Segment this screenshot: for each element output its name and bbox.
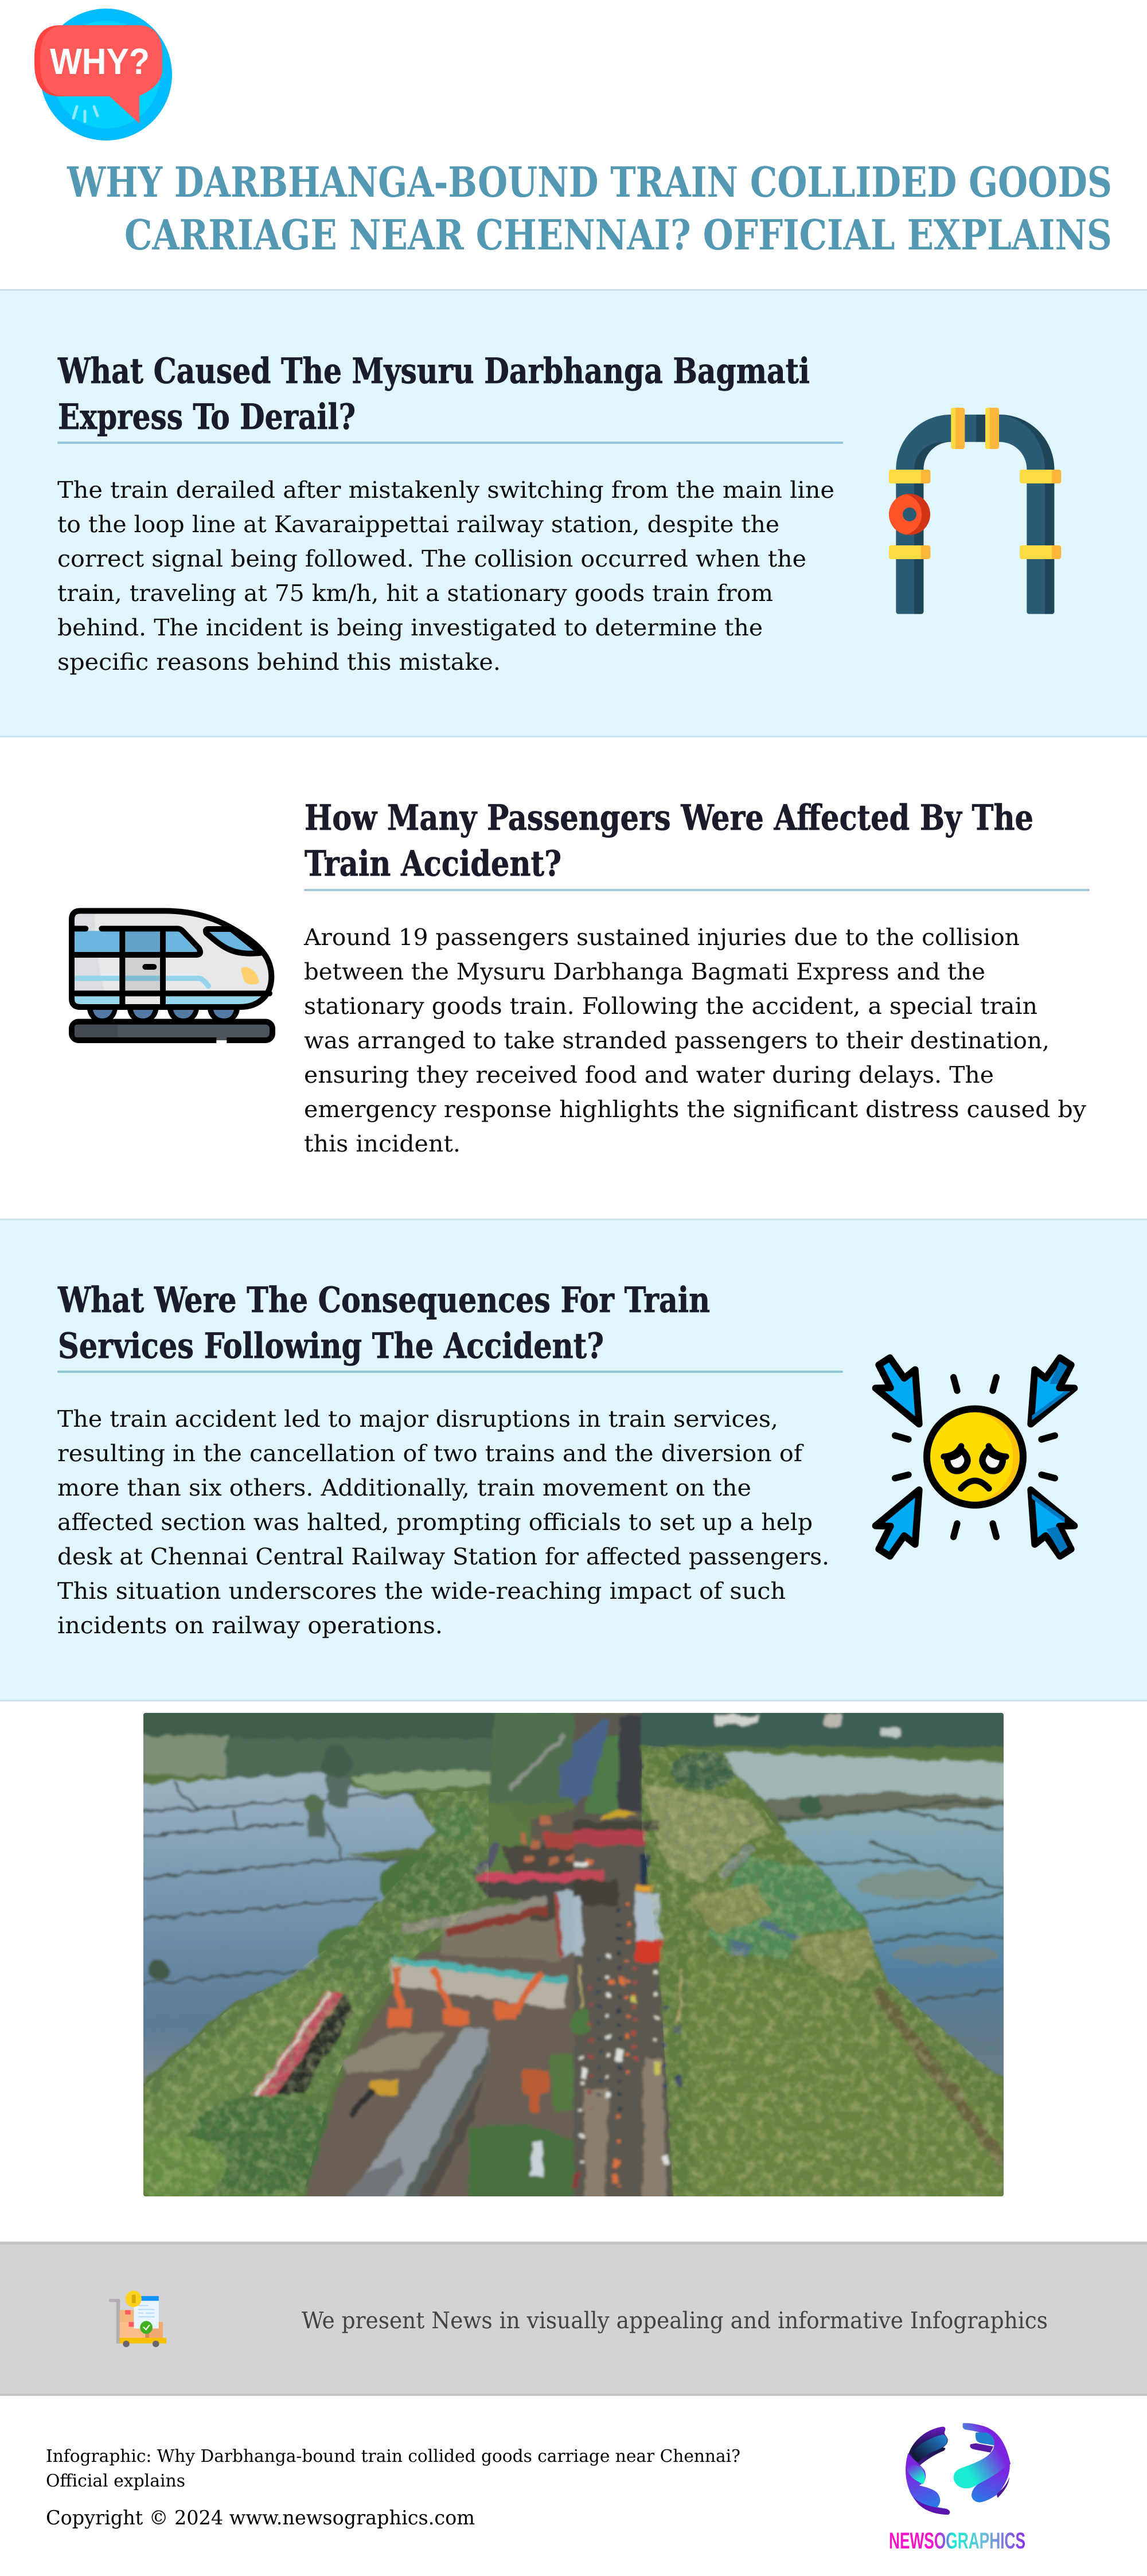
text block: resulting in the cancellation of two trains and the diversion of	[57, 1441, 804, 1467]
text block: The train derailed after mistakenly switching from the main line	[57, 477, 834, 504]
photo foliage texture	[143, 1713, 1004, 2196]
panel: passengers affected	[0, 737, 1147, 1219]
icon: why speech bubble: WHY?	[50, 41, 150, 82]
footer caption	[46, 2446, 740, 2491]
text block: ensuring they received food and water during delays. The	[304, 1062, 994, 1088]
text block	[303, 924, 1086, 1157]
icon: cart with invoice	[109, 2290, 166, 2347]
text block: to the loop line at Kavaraippettai railway station, despite the	[57, 512, 779, 538]
title	[67, 158, 1112, 260]
photo: aerial view of the derailed train	[123, 1707, 1013, 2199]
text block: this incident.	[304, 1131, 461, 1157]
heading: Express To Derail?	[58, 397, 356, 438]
text block: incidents on railway operations.	[57, 1613, 443, 1639]
text block: The train accident led to major disruptions in train services,	[57, 1406, 778, 1433]
heading: What Were The Consequences For Train	[57, 1280, 710, 1321]
text block: between the Mysuru Darbhanga Bagmati Express and the	[304, 959, 985, 985]
text block: This situation underscores the wide-reaching impact of such	[57, 1578, 786, 1605]
text block: train, traveling at 75 km/h, hit a stationary goods train from	[57, 580, 773, 607]
text block: correct signal being followed. The collision occurred when the	[57, 546, 806, 572]
footer caption: Official explains	[46, 2471, 185, 2491]
footer	[46, 2423, 1025, 2554]
copyright: Copyright © 2024 www.newsographics.com	[46, 2507, 475, 2530]
heading: Services Following The Accident?	[58, 1326, 604, 1367]
band: tagline	[0, 2242, 1147, 2396]
text block: desk at Chennai Central Railway Station for affected passengers.	[57, 1544, 829, 1570]
heading: How Many Passengers Were Affected By The	[305, 798, 1033, 838]
header section	[34, 9, 1112, 260]
panel: consequences for train services	[0, 1219, 1147, 1701]
text block: specific reasons behind this mistake.	[57, 649, 501, 676]
heading	[304, 798, 1090, 891]
icon: why speech bubble	[34, 9, 172, 140]
text block: more than six others. Additionally, train movement on the	[57, 1475, 751, 1501]
tagline text: We present News in visually appealing and informative Infographics	[302, 2308, 1048, 2334]
text block: emergency response highlights the significant distress caused by	[304, 1096, 1086, 1123]
heading	[57, 351, 843, 444]
logo: newsographics	[889, 2423, 1025, 2554]
text block	[57, 1406, 829, 1639]
text block: behind. The incident is being investigated to determine the	[57, 615, 763, 641]
text block: stationary goods train. Following the accident, a special train	[304, 993, 1037, 1020]
text block: affected section was halted, prompting officials to set up a help	[57, 1509, 813, 1536]
panel: what caused the derailment	[0, 289, 1147, 737]
text block: was arranged to take stranded passengers to their destination,	[304, 1028, 1050, 1054]
icon: sad face with arrows	[876, 1358, 1074, 1556]
icon: pipe	[889, 408, 1061, 614]
heading: Train Accident?	[305, 844, 561, 884]
text block: Around 19 passengers sustained injuries due to the collision	[303, 924, 1020, 951]
icon: train	[72, 911, 272, 1043]
logo: newsographics: NEWSOGRAPHICS	[889, 2528, 1025, 2554]
heading: What Caused The Mysuru Darbhanga Bagmati	[57, 351, 810, 392]
text block	[57, 477, 834, 676]
footer caption: Infographic: Why Darbhanga-bound train collided goods carriage near Chennai?	[46, 2446, 740, 2466]
heading	[57, 1280, 843, 1373]
